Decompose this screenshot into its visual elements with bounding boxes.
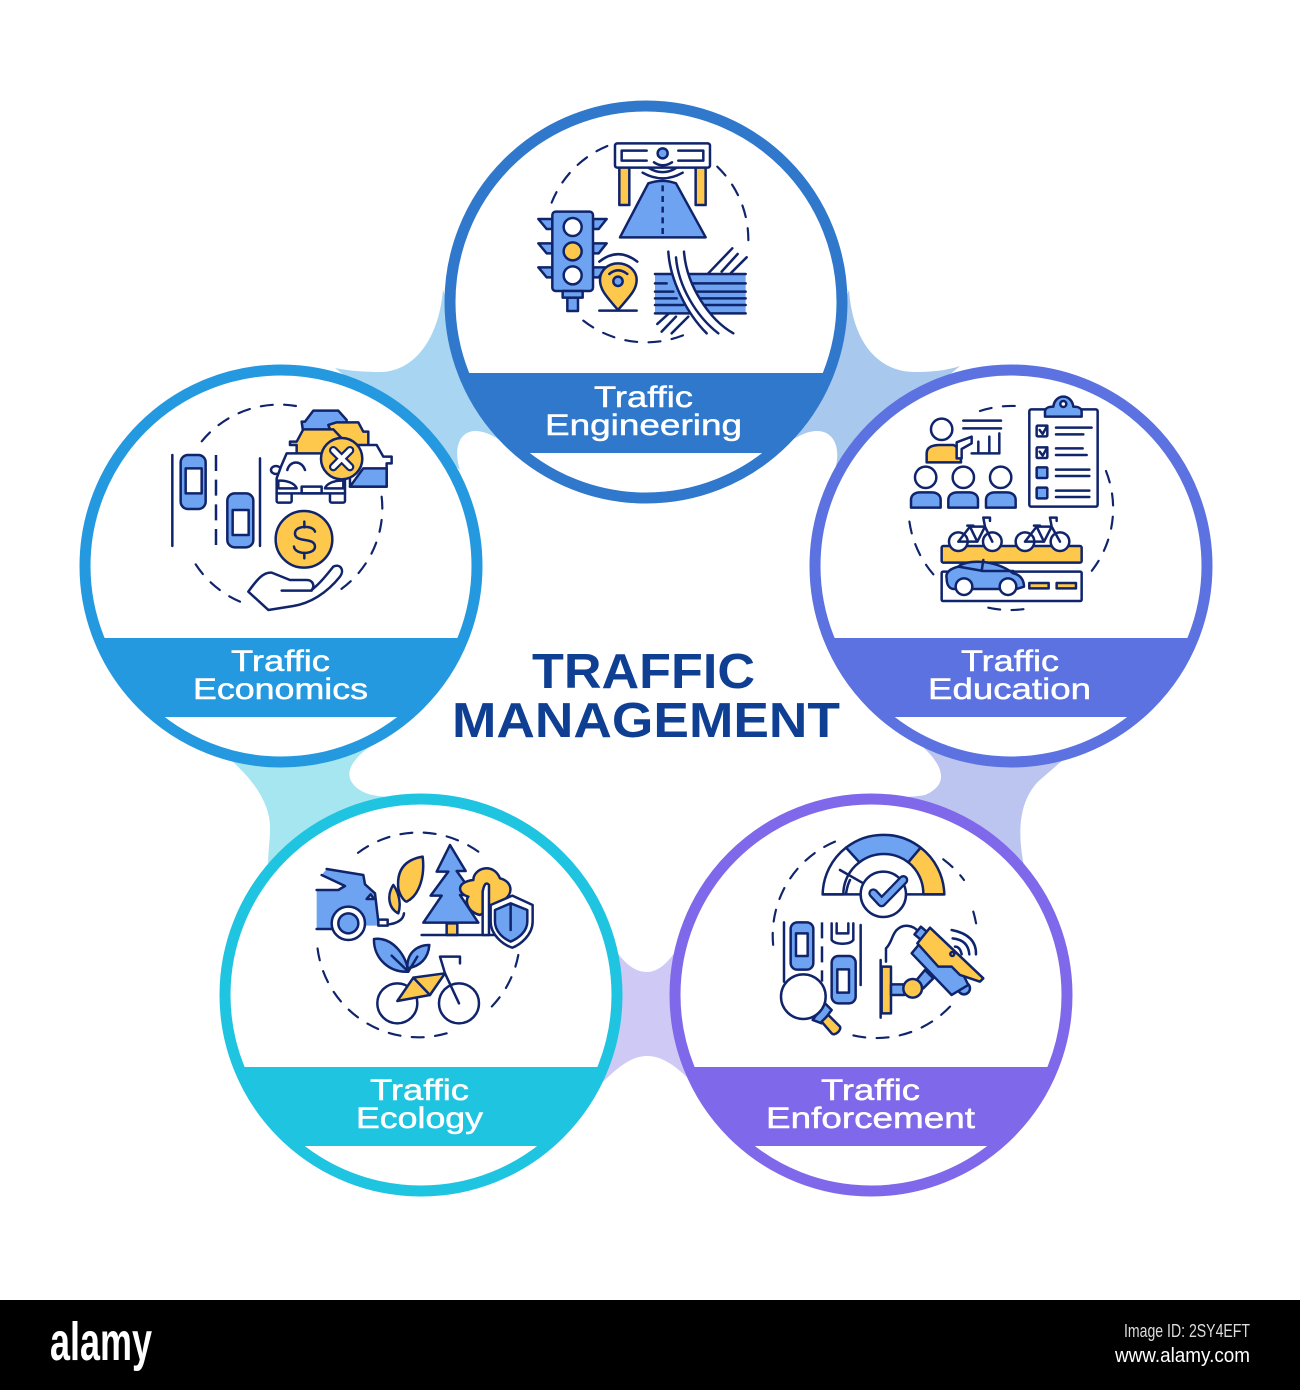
panel: traffic engineering [440,106,860,498]
label band: traffic education [834,638,1188,717]
panel: traffic ecology [215,799,635,1191]
label band: traffic economics [104,638,458,717]
connector: education to enforcement [892,748,1068,866]
connector: economics to ecology [225,748,400,866]
label: traffic economics: Economics [193,673,368,706]
label: traffic engineering: Engineering [545,409,742,442]
label: traffic enforcement: Enforcement [766,1102,976,1135]
icon: road safety training [909,397,1113,610]
label: traffic education [928,645,1091,706]
label: traffic enforcement: Traffic [821,1074,920,1107]
label: traffic education: Traffic [961,645,1059,678]
website: www.alamy.com [1114,1345,1250,1367]
label: traffic enforcement [766,1074,976,1135]
label: traffic economics: Traffic [231,645,330,678]
label: traffic education: Education [928,673,1091,706]
label: traffic economics [193,645,368,706]
title [452,645,840,748]
footer bar [0,1300,1300,1390]
title: TRAFFIC [532,645,755,699]
label band: traffic ecology [244,1067,598,1146]
label: traffic ecology: Traffic [370,1074,469,1107]
connector: engineering to economics [335,290,500,470]
label: traffic ecology [356,1074,483,1135]
label: traffic ecology: Ecology [356,1102,483,1135]
image id: Image ID: 2SY4EFT [1124,1321,1250,1341]
icon: road monitoring [538,143,748,342]
label band: traffic enforcement [694,1067,1048,1146]
connector: engineering to education [792,290,960,470]
footer logo: alamy [50,1312,152,1372]
icon: speed camera [773,835,983,1038]
panel: traffic economics [75,370,495,762]
icon: green transport [317,833,533,1037]
title: MANAGEMENT [452,694,840,748]
panel: traffic education [805,370,1225,762]
icon: road pricing [172,405,392,610]
label band: traffic engineering [469,373,823,453]
connector: ecology to enforcement [600,945,695,1085]
panel: traffic enforcement [665,799,1085,1191]
label: traffic engineering [545,381,742,442]
label: traffic engineering: Traffic [594,381,693,414]
